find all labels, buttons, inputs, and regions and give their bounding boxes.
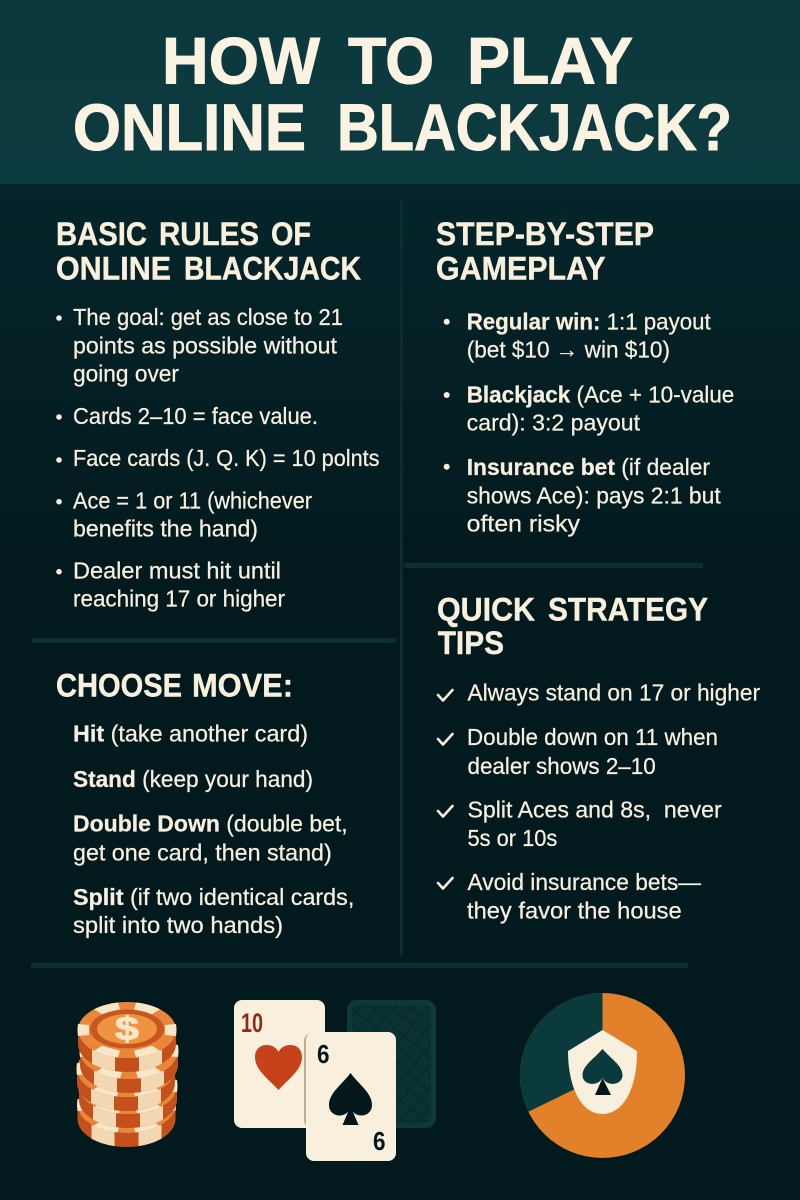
tips list: Avoid insurance bets— <box>468 869 701 895</box>
header band with title <box>0 0 800 184</box>
rules list: reaching 17 or higher <box>73 586 285 612</box>
gameplay list: Blackjack (Ace + 10-value <box>467 382 734 408</box>
rules list: Dealer must hit until <box>73 557 281 583</box>
title: ONLINE <box>73 90 306 164</box>
gameplay list: Regular win: 1:1 payout <box>467 308 711 334</box>
panel: choose move <box>56 668 354 938</box>
tips list: dealer shows 2–10 <box>468 753 656 779</box>
heading: step-by-step gameplay: STEP-BY-STEP <box>436 216 654 252</box>
gameplay list: (bet $10 → win $10) <box>467 336 670 362</box>
panel: quick strategy tips <box>437 592 760 923</box>
tips list: Double down on 11 when <box>467 724 718 750</box>
rules list: Cards 2–10 = face value. <box>73 403 318 429</box>
rules list <box>56 304 379 612</box>
heading: basic rules: ONLINE <box>56 250 171 286</box>
heading: basic rules <box>56 216 361 286</box>
heading: basic rules: BLACKJACK <box>184 250 361 286</box>
card: six of spades: 6 <box>373 1126 386 1156</box>
title: HOW <box>162 24 321 98</box>
heading: step-by-step gameplay: GAMEPLAY <box>436 250 606 286</box>
rules list: points as possible without <box>73 332 338 358</box>
heading: choose move <box>56 668 293 704</box>
rules list: Ace = 1 or 11 (whichever <box>73 487 312 513</box>
gameplay list: often risky <box>467 511 581 537</box>
move list: Hit (take another card) <box>73 721 308 747</box>
spade stem <box>595 1078 611 1095</box>
move list: Stand (keep your hand) <box>73 766 313 792</box>
heading: quick strategy tips: TIPS <box>438 625 504 661</box>
move list: get one card, then stand) <box>73 840 332 866</box>
rules list: The goal: get as close to 21 <box>73 304 343 330</box>
card back <box>347 1000 436 1128</box>
tips list: Split Aces and 8s, never <box>468 796 722 822</box>
heading: basic rules: BASIC <box>56 216 147 252</box>
gameplay list: card): 3:2 payout <box>467 410 641 436</box>
title: TO <box>348 24 434 98</box>
gameplay list: Insurance bet (if dealer <box>467 454 710 480</box>
icon: stack of chips <box>76 1002 178 1147</box>
title <box>73 24 732 164</box>
title: PLAY <box>467 24 633 98</box>
tips list <box>438 680 760 923</box>
move list: split into two hands) <box>73 912 283 938</box>
heading: choose move: CHOOSE <box>56 668 182 704</box>
rules list: benefits the hand) <box>73 516 258 542</box>
card: ten of hearts: 10 <box>241 1008 263 1038</box>
icon: pie chart with spade shield <box>520 993 685 1158</box>
icon: playing cards <box>234 1000 436 1161</box>
heading: basic rules: OF <box>271 216 311 252</box>
card: six of spades: 6 <box>317 1039 330 1069</box>
rules list: Face cards (J. Q. K) = 10 polnts <box>73 445 380 471</box>
tips list: they favor the house <box>467 897 682 923</box>
move list <box>73 721 354 938</box>
rules list: going over <box>73 361 179 387</box>
icon: stack of chips: $ <box>115 1010 139 1047</box>
gameplay list: shows Ace): pays 2:1 but <box>467 482 721 508</box>
heading: quick strategy tips: QUICK <box>437 592 535 628</box>
shield <box>568 1030 637 1114</box>
move list: Split (if two identical cards, <box>73 884 354 910</box>
spade <box>583 1049 622 1084</box>
heading: choose move: MOVE: <box>192 668 293 704</box>
panel: step-by-step gameplay <box>436 216 734 537</box>
heading: quick strategy tips <box>437 592 708 661</box>
card: six of spades <box>304 1032 396 1161</box>
title: BLACKJACK? <box>337 90 732 164</box>
move list: Double Down (double bet, <box>73 811 348 837</box>
card: ten of hearts <box>234 1000 325 1128</box>
heading: step-by-step gameplay <box>436 216 654 286</box>
tips list: Always stand on 17 or higher <box>468 680 760 706</box>
gameplay list <box>444 308 734 537</box>
panel: basic rules <box>56 216 380 612</box>
heading: quick strategy tips: STRATEGY <box>548 592 708 628</box>
tips list: 5s or 10s <box>468 825 557 851</box>
heading: basic rules: RULES <box>159 216 259 252</box>
